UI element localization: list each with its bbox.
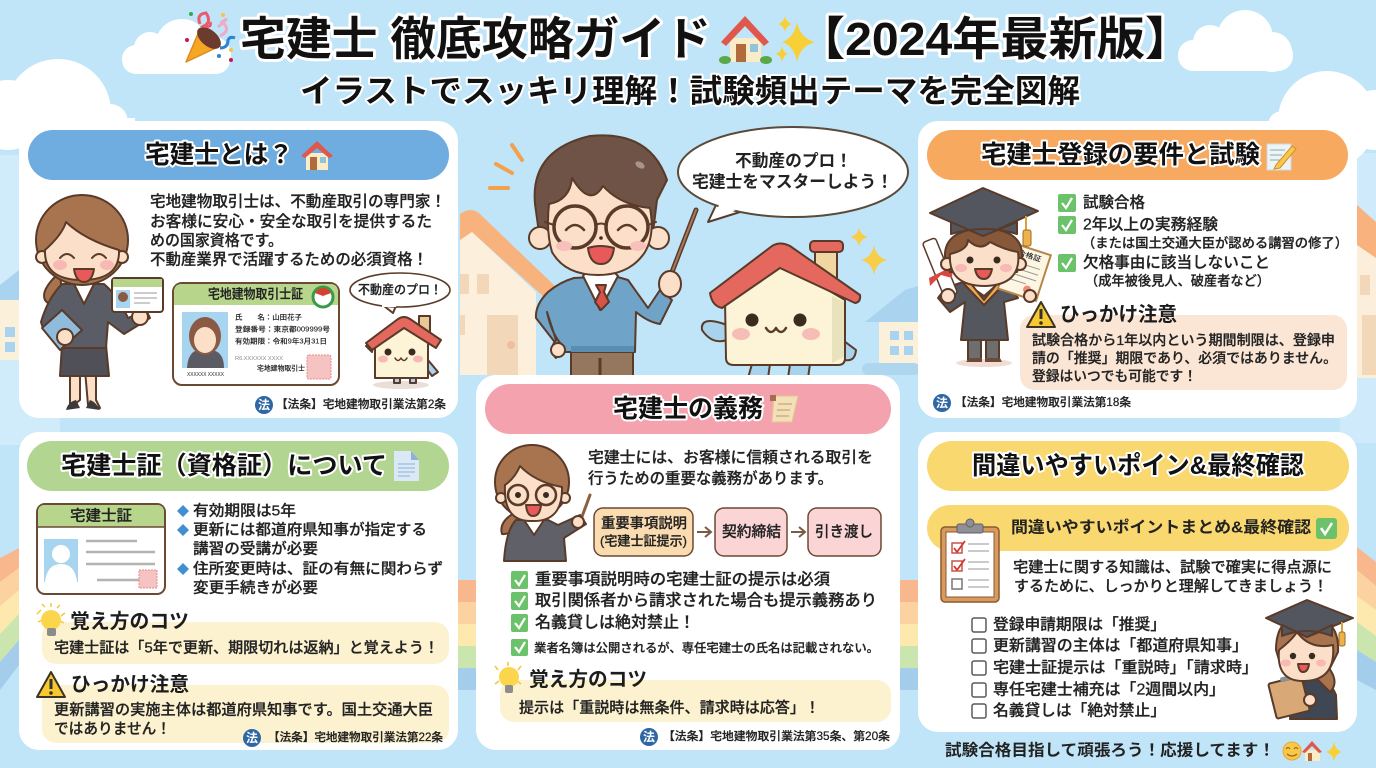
panel: 宅建士とは — [19, 121, 458, 418]
card: 宅建士証 — [70, 508, 132, 524]
icon: woman teacher — [495, 445, 590, 561]
text block: 行うための重要な義務があります。 — [588, 468, 833, 488]
checklist: 試験合格 — [1083, 194, 1145, 212]
checklist: 重要事項説明時の宅建士証の提示は必須 — [535, 570, 830, 588]
rays — [490, 145, 522, 188]
callout: warning — [37, 672, 449, 743]
checklist: 業者名簿は公開されるが、専任宅建士の氏名は記載されない。 — [534, 640, 879, 655]
checklist: 登録申請期限は「推奨」 — [993, 616, 1166, 634]
icon: sparkles — [776, 16, 815, 62]
flow chart — [594, 508, 881, 556]
icon: sparkles — [850, 227, 887, 275]
citation: 法 — [246, 730, 258, 745]
text block: 宅建士に関する知識は、試験で確実に得点源に — [1013, 559, 1332, 576]
heading — [927, 441, 1349, 491]
heading — [28, 130, 449, 180]
step 2 — [715, 508, 787, 556]
callout: tips: 提示は「重説時は無条件、請求時は応答」！ — [519, 698, 820, 716]
icon: house — [301, 141, 333, 170]
citation: 【法条】宅地建物取引業法第35条、第20条 — [663, 729, 891, 743]
heading: 間違いやすいポイン&最終確認 — [972, 452, 1304, 480]
text block: 宅建士には、お客様に信頼される取引を — [588, 448, 873, 466]
arrow — [697, 527, 711, 537]
checklist: 専任宅建士補充は「2週間以内」 — [993, 680, 1225, 698]
citation — [640, 728, 891, 746]
center teacher character — [490, 135, 696, 376]
text block — [1013, 559, 1332, 595]
text block: するために、しっかりと理解してきましょう！ — [1014, 578, 1328, 595]
icon: warning triangle — [37, 672, 65, 697]
icon: scroll — [770, 395, 798, 422]
citation — [933, 394, 1131, 412]
footer message — [945, 740, 1342, 762]
step 1: (宅建士証提示) — [600, 534, 687, 548]
icon: bulb — [495, 662, 521, 693]
icon: warning triangle — [1027, 302, 1055, 327]
checklist: 欠格事由に該当しないこと — [1083, 252, 1270, 272]
center speech bubble: 不動産のプロ！ — [735, 152, 852, 170]
callout: warning: ひっかけ注意 — [1060, 303, 1177, 326]
callout: warning: ではありません！ — [54, 720, 171, 738]
checklist: 宅建士証提示は「重説時」「請求時」 — [993, 658, 1258, 676]
icon: document — [394, 451, 419, 481]
text block — [150, 192, 446, 268]
citation: 【法条】宅地建物取引業法第18条 — [955, 395, 1131, 409]
callout: tips: 覚え方のコツ — [529, 668, 647, 691]
subheading: 間違いやすいポイントまとめ&最終確認 — [1011, 518, 1311, 536]
house mascot — [702, 241, 860, 378]
bullet list: 変更手続きが必要 — [193, 578, 318, 596]
callout: warning: ひっかけ注意 — [71, 673, 189, 696]
citation: 法 — [258, 397, 270, 412]
step 3 — [808, 508, 881, 556]
callout: warning — [1020, 302, 1347, 390]
checklist: 取引関係者から請求された場合も提示義務あり — [535, 592, 877, 610]
subheading — [927, 505, 1349, 551]
icon: memo — [1267, 144, 1296, 170]
step 1 — [594, 508, 693, 556]
citation: 【法条】宅地建物取引業法第22条 — [268, 730, 443, 744]
callout: warning: 請の「推奨」期限であり、必須ではありません。 — [1032, 350, 1337, 366]
step 3: 引き渡し — [815, 524, 873, 540]
text block: 不動産業界で活躍するための必須資格！ — [150, 250, 428, 268]
icon: smiley — [1283, 742, 1301, 760]
card — [37, 504, 165, 594]
center speech bubble — [678, 127, 908, 222]
step 2: 契約締結 — [722, 522, 781, 540]
icon: house mascot — [366, 316, 441, 389]
icon: clipboard — [941, 519, 999, 602]
citation: 法 — [643, 729, 655, 744]
panel: 間違いやすいポイント — [918, 432, 1357, 732]
license card: R6.XXXXXX XXXX — [235, 356, 284, 362]
bullet list: 住所変更時は、証の有無に関わらず — [193, 560, 443, 578]
checklist: （または国土交通大臣が認める講習の修了） — [1082, 234, 1348, 250]
callout: warning: 登録はいつでも可能です！ — [1032, 368, 1197, 384]
heading: 宅建士証（資格証）について — [61, 452, 387, 480]
text block: お客様に安心・安全な取引を提供するた — [150, 212, 432, 230]
icon: house — [719, 16, 772, 64]
heading: 宅建士登録の要件と試験 — [981, 141, 1260, 169]
license card: 登録番号：東京都009999号 — [235, 324, 330, 334]
title: 【2024年最新版】 — [797, 13, 1193, 65]
text block — [588, 448, 873, 488]
blue house behind — [862, 286, 920, 375]
orange house behind — [460, 210, 556, 375]
license card: 宅地建物取引士 — [257, 364, 305, 372]
bullet list — [177, 502, 443, 596]
text block: 宅地建物取引士は、不動産取引の専門家！ — [150, 192, 446, 210]
license card: 宅地建物取引士証 — [208, 286, 303, 302]
callout: tips — [37, 603, 449, 664]
icon: woman with card — [36, 195, 163, 410]
panel: 登録の要件と試験 — [918, 121, 1357, 418]
icon: graduate boy: 合格証 — [1017, 248, 1042, 264]
icon: sparkle — [1326, 741, 1342, 762]
license card: 氏 名：山田花子 — [235, 312, 302, 322]
heading: 宅建士の義務 — [613, 395, 763, 423]
bullet list: 講習の受講が必要 — [193, 540, 318, 558]
bullet list: 有効期限は5年 — [193, 502, 296, 520]
icon: party popper — [185, 12, 235, 62]
checklist: 名義貸しは絶対禁止！ — [535, 614, 695, 632]
title: 宅建士 徹底攻略ガイド — [240, 13, 711, 65]
callout: warning: 更新講習の実施主体は都道府県知事です。国土交通大臣 — [54, 700, 433, 718]
small id card — [112, 278, 163, 312]
license card — [173, 283, 339, 385]
speech bubble — [350, 273, 450, 313]
callout: tips: 覚え方のコツ — [70, 610, 189, 633]
icon: graduate girl — [1266, 600, 1353, 719]
citation: 【法条】宅地建物取引業法第2条 — [276, 397, 446, 411]
license card: 有効期限：令和9年3月31日 — [235, 336, 327, 346]
subtitle: イラストでスッキリ理解！試験頻出テーマを完全図解 — [300, 73, 1080, 109]
bullet list: 更新には都道府県知事が指定する — [193, 520, 427, 538]
checklist: 2年以上の実務経験 — [1083, 216, 1219, 234]
checklist: （成年被後見人、破産者など） — [1085, 272, 1270, 288]
checklist — [511, 570, 879, 656]
checklist: 名義貸しは「絶対禁止」 — [993, 702, 1166, 720]
heading — [27, 441, 449, 491]
speech bubble: 不動産のプロ！ — [358, 282, 442, 297]
icon: graduate boy — [922, 188, 1051, 367]
icon: house — [1302, 741, 1322, 761]
panel: 宅建士証 — [19, 432, 458, 750]
callout: warning: 試験合格から1年以内という期間制限は、登録申 — [1032, 332, 1335, 348]
citation — [255, 396, 446, 414]
callout: tips — [495, 662, 891, 722]
citation: 法 — [936, 395, 948, 410]
icon: bulb — [37, 603, 65, 636]
title — [185, 12, 1193, 65]
step 1: 重要事項説明 — [601, 515, 687, 531]
callout: tips: 宅建士証は「5年で更新、期限切れは返納」と覚えよう！ — [54, 640, 439, 656]
checklist: 更新講習の主体は「都道府県知事」 — [993, 636, 1248, 654]
panel: 宅建士の義務 — [476, 375, 900, 750]
citation — [243, 729, 443, 747]
center speech bubble: 宅建士をマスターしよう！ — [692, 172, 893, 192]
heading — [485, 384, 891, 434]
checklist — [1058, 194, 1348, 288]
arrow — [791, 527, 805, 537]
heading — [927, 130, 1348, 180]
checklist — [972, 616, 1258, 720]
text block: めの国家資格です。 — [150, 232, 283, 250]
license card: XXXXXX XXXXX — [187, 372, 225, 378]
footer message: 試験合格目指して頑張ろう！応援してます！ — [945, 740, 1275, 760]
heading: 宅建士とは？ — [145, 141, 293, 169]
